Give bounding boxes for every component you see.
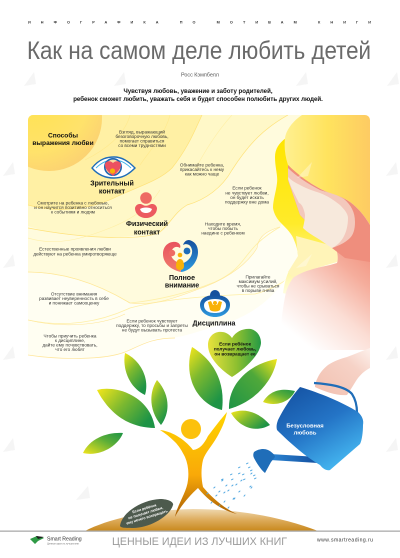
heart leaf: [208, 329, 261, 377]
dark leaf with text: ему нечего возвращать: [126, 509, 169, 526]
text: natural love: действуют на ребенка умиротворяюще: [33, 250, 117, 256]
text: hug: [180, 162, 225, 176]
chin shadow: [288, 236, 338, 276]
face: [288, 177, 348, 248]
tree leaves: [83, 347, 295, 454]
text: look with love: Смотрите на ребенка с любовью,: [37, 200, 109, 206]
water drops: [207, 463, 256, 508]
panel heading: Способы: [48, 132, 78, 140]
label: visual contact: [90, 180, 134, 196]
illustration: mother's head: [273, 115, 370, 350]
icon: discipline: [200, 290, 230, 317]
text: look with love: [34, 200, 112, 214]
text: teach discipline: дайте ему почувствовать,: [42, 342, 98, 348]
footer slogan: ЦЕННЫЕ ИДЕИ ИЗ ЛУЧШИХ КНИГ: [112, 536, 287, 548]
label: visual contact: контакт: [99, 188, 126, 196]
text: effort: максимум усилий,: [239, 278, 277, 284]
text: teach discipline: [42, 334, 98, 352]
text: hug: Обнимайте ребенка,: [180, 162, 224, 168]
text: support: Если ребенок: [232, 186, 263, 190]
text: support: он будет искать: [230, 195, 264, 200]
label: discipline: Дисциплина: [193, 320, 236, 328]
watering can: любовь: [294, 430, 317, 436]
text: effort: чтобы не срываться: [237, 284, 280, 288]
text: requests: [116, 318, 188, 332]
footer line: [0, 530, 400, 532]
text: look: безоговорочную любовь,: [115, 134, 169, 139]
text: hug: как можно чаще: [185, 172, 220, 176]
text: look with love: к событиям и людям: [51, 210, 95, 214]
text: look with love: и он научится позитивно относиться: [34, 205, 112, 210]
hill: [85, 509, 318, 531]
text: lack of attention: и понижает самооценку: [49, 300, 100, 306]
text: effort: Прилагайте: [246, 274, 271, 280]
neck: [282, 252, 370, 350]
label: physical contact: Физический: [126, 220, 168, 228]
text: lack of attention: развивает неуверенность в себе: [39, 296, 109, 301]
panel heading: выражения любви: [32, 139, 94, 147]
text: teach discipline: что его любят: [55, 347, 86, 352]
label: full attention: Полное: [169, 275, 195, 282]
watermarks: [3, 72, 399, 500]
label: visual contact: Зрительный: [90, 180, 134, 188]
text: effort: в порыве гнева: [242, 288, 275, 293]
text: time: [201, 222, 245, 236]
text: requests: не будут вызывать протеста: [122, 328, 183, 332]
text: look: помогает справиться: [120, 138, 165, 144]
sun circle: [28, 115, 102, 171]
author: Росс Кэмпбелл: [181, 72, 219, 78]
footer logo: [30, 536, 82, 546]
text: support: [225, 186, 269, 204]
text: lack of attention: [39, 292, 109, 306]
heart leaf: Если ребёнок: [219, 340, 252, 346]
label: physical contact: [126, 220, 168, 236]
body: [277, 387, 363, 470]
heart leaf: он возвращает ее: [214, 352, 256, 356]
hair strip: [273, 138, 330, 294]
footer logo: Ценные идеи из лучших книг: [47, 542, 79, 546]
text: support: поддержку вне дома: [225, 200, 269, 204]
person figure: [160, 412, 237, 517]
label: full attention: внимание: [165, 282, 199, 290]
text: effort: [237, 274, 280, 293]
text: hug: прикасайтесь к нему: [180, 166, 225, 172]
series label: ИНФОГРАФИКА ПО МОТИВАМ КНИГИ: [28, 20, 371, 24]
footer url: www.smartreading.ru: [317, 538, 373, 544]
dark leaf with text: [120, 499, 173, 528]
icon: full attention: [163, 240, 198, 272]
panel: yellow background with waves: [28, 115, 337, 359]
arm: [315, 348, 370, 395]
rose: [253, 449, 275, 473]
text: time: наедине с ребенком: [201, 230, 245, 236]
footer logo: Smart Reading: [47, 536, 82, 542]
text: look: [115, 128, 169, 148]
text: natural love: Естественные проявления любви: [39, 246, 111, 252]
intro text: Чувствуя любовь, уважение и заботу родителей,: [123, 88, 273, 95]
intro text: ребенок сможет любить, уважать себя и будет способен полюбить других людей.: [73, 96, 323, 103]
watering can: [253, 383, 363, 473]
text: look: со всеми трудностями: [118, 143, 166, 148]
text: teach discipline: к дисциплине,: [55, 338, 85, 343]
text: lack of attention: Отсутствие внимания: [51, 292, 98, 296]
text: time: Находите время,: [205, 222, 241, 226]
text: time: чтобы побыть: [208, 226, 238, 231]
intro text: [73, 88, 323, 103]
heart leaf: получает любовь,: [214, 346, 256, 352]
text: natural love: [33, 246, 117, 256]
spout: [270, 454, 318, 463]
label: full attention: [165, 275, 199, 290]
pink band: [288, 165, 370, 262]
handle: [314, 383, 357, 413]
icon: physical contact: [135, 192, 157, 218]
hair: [285, 115, 370, 225]
dark leaf with text: Если ребёнок: [132, 503, 157, 514]
text: support: не чувствует любви,: [225, 190, 269, 196]
label: physical contact: контакт: [134, 230, 161, 236]
watering can: Безусловная: [286, 424, 324, 430]
text: look: Взгляд, выражающий: [119, 128, 165, 134]
hair watermarks: [296, 162, 312, 360]
text: requests: поддержку, то просьбы и запреты: [116, 323, 188, 328]
text: teach discipline: Чтобы приучить ребенка: [44, 334, 97, 338]
dark leaf with text: не получает любви,: [128, 506, 164, 520]
icon: eye: [92, 157, 135, 178]
text: requests: Если ребенок чувствует: [127, 318, 178, 324]
pale hair band: [288, 168, 355, 248]
panel heading: [32, 132, 94, 147]
